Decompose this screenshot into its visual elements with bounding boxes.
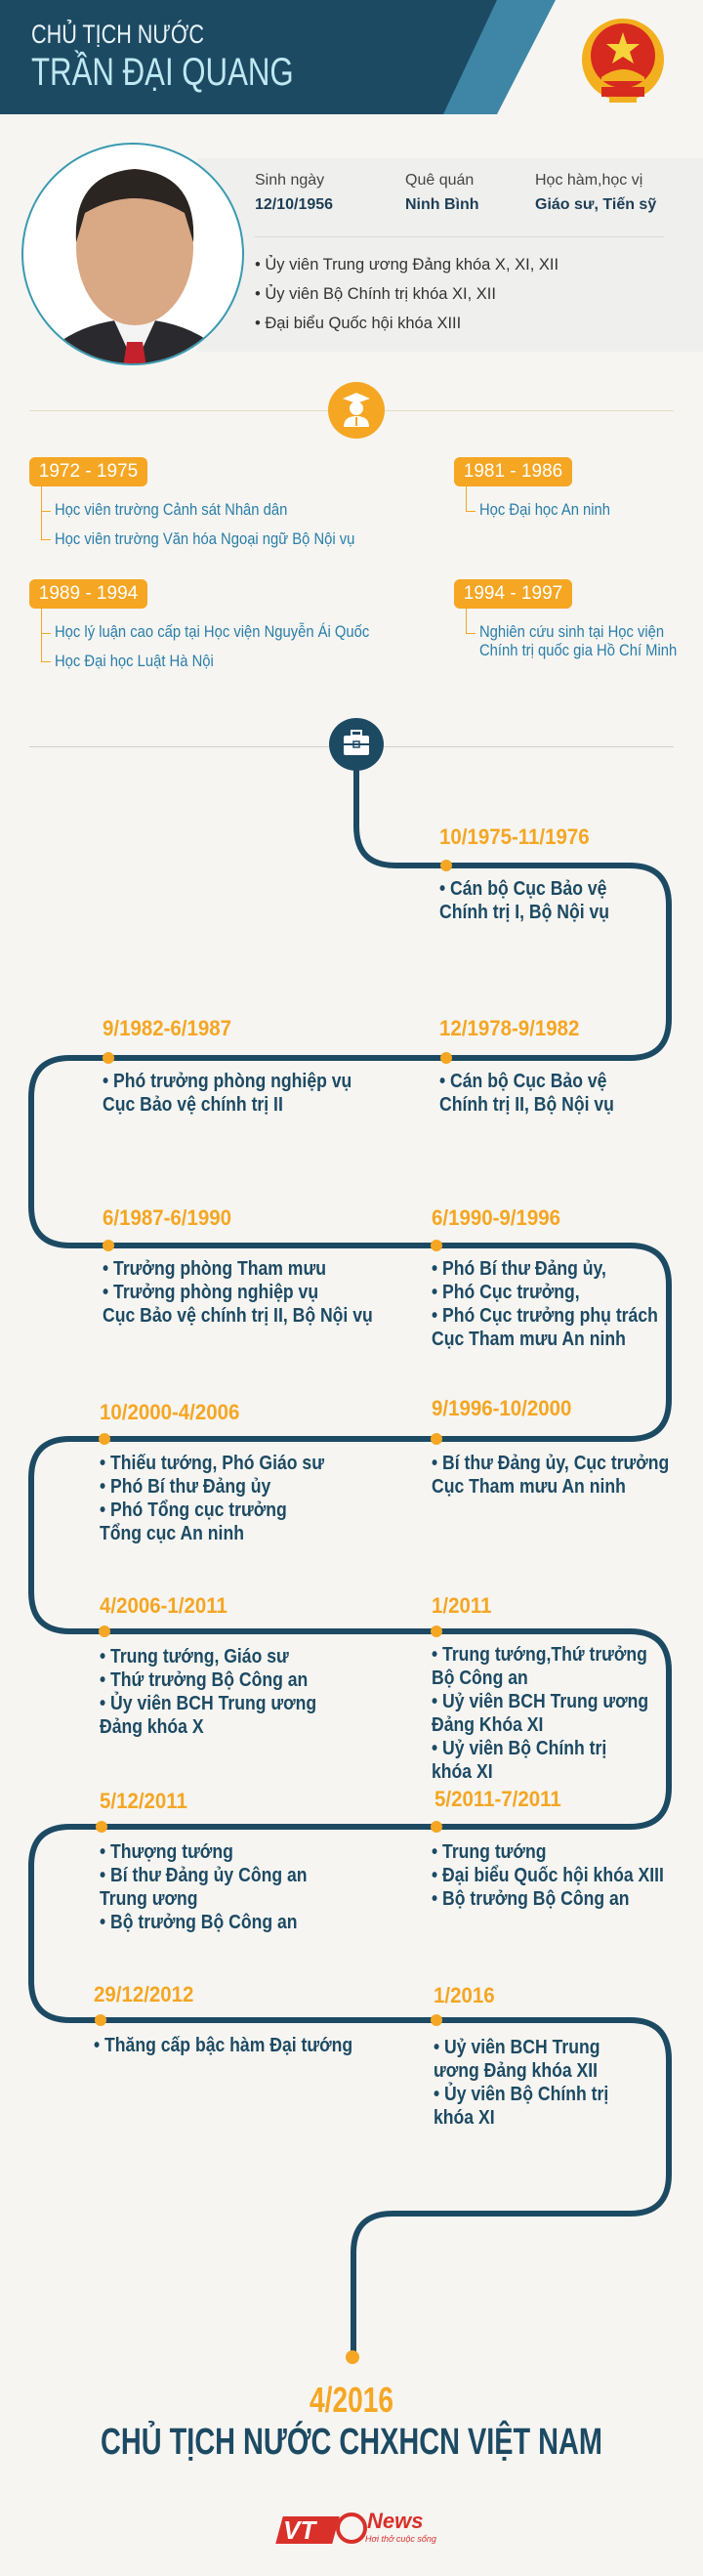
entry 10/2000: • Thiếu tướng, Phó Giáo sư [100,1453,324,1474]
info: hometown [405,172,479,213]
entry 12/1978 [439,1016,614,1116]
icon: national emblem [582,19,664,103]
edu 1989-1994: Học lý luận cao cấp tại Học viện Nguyễn Ái Quốc [55,622,369,641]
entry 4/2006 [100,1593,316,1738]
entry 6/1990: Cục Tham mưu An ninh [432,1329,626,1350]
entry 10/1975 [439,824,609,923]
entry 10/2000: • Phó Bí thư Đảng ủy [100,1476,270,1498]
entry 4/2006: 4/2006-1/2011 [100,1593,227,1618]
bullet list: • Ủy viên Bộ Chính trị khóa XI, XII [255,285,496,303]
entry 9/1996 [432,1396,669,1498]
entry 1/2016: 1/2016 [434,1983,495,2007]
entry 5/12/2011: 5/12/2011 [100,1789,187,1813]
logo: VTC News: News [367,2509,423,2533]
icon: briefcase [329,718,384,771]
final title: CHỦ TỊCH NƯỚC CHXHCN VIỆT NAM [101,2422,602,2463]
entry 6/1987 [103,1205,373,1327]
entry 10/2000: 10/2000-4/2006 [100,1400,239,1424]
entry 9/1996: 9/1996-10/2000 [432,1396,571,1420]
entry 6/1987: 6/1987-6/1990 [103,1205,231,1230]
edu 1972-1975 [29,457,354,548]
info: birth: 12/10/1956 [255,196,333,213]
entry 1/2016: • Uỷ viên BCH Trung [434,2037,600,2058]
bullet list: • Ủy viên Trung ương Đảng khóa X, XI, XII [255,256,558,274]
entry 1/2016: • Ủy viên Bộ Chính trị [434,2084,608,2105]
entry 12/1978: 12/1978-9/1982 [439,1016,579,1040]
entry 1/2016: ương Đảng khóa XII [434,2060,598,2082]
bullet list: • Đại biểu Quốc hội khóa XIII [255,315,461,332]
icon: graduate [328,382,385,439]
edu 1981-1986: Học Đại học An ninh [479,500,610,519]
info: birth [255,172,333,213]
title name: TRẦN ĐẠI QUANG [31,51,294,94]
entry 5/2011: • Trung tướng [432,1841,546,1863]
info: degree: Học hàm,học vị [535,172,642,189]
entry 5/12/2011 [100,1789,308,1933]
entry 1/2011: • Trung tướng,Thứ trưởng [432,1644,647,1666]
entry 6/1990: • Phó Bí thư Đảng ủy, [432,1258,606,1280]
entry 4/2006: • Trung tướng, Giáo sư [100,1646,289,1668]
entry 1/2011: khóa XI [432,1761,493,1783]
entry 4/2006: Đảng khóa X [100,1716,204,1738]
entry 10/2000: • Phó Tổng cục trưởng [100,1499,287,1521]
entry 1/2011: Bộ Công an [432,1668,528,1689]
entry 5/12/2011: • Bộ trưởng Bộ Công an [100,1912,298,1933]
entry 10/1975: Chính trị I, Bộ Nội vụ [439,902,609,923]
entry 9/1982 [103,1016,352,1116]
title line 1: CHỦ TỊCH NƯỚC [31,20,204,49]
entry 10/1975: 10/1975-11/1976 [439,824,590,849]
edu 1989-1994: 1989 - 1994 [39,583,138,604]
entry 12/1978: • Cán bộ Cục Bảo vệ [439,1071,606,1092]
entry 5/12/2011: Trung ương [100,1888,198,1910]
entry 1/2011: • Uỷ viên BCH Trung ương [432,1691,648,1712]
entry 29/12/2012: • Thăng cấp bậc hàm Đại tướng [94,2035,352,2056]
entry 1/2011: • Uỷ viên Bộ Chính trị [432,1738,606,1759]
logo: VTC News: VT [283,2515,315,2545]
entry 5/2011: 5/2011-7/2011 [434,1787,561,1811]
text: • Bộ trưởng Bộ Công an [432,1888,630,1910]
entry 6/1990 [432,1205,658,1350]
entry 1/2016 [434,1983,608,2129]
entry 5/2011: • Đại biểu Quốc hội khóa XIII [432,1865,664,1886]
entry 5/12/2011: • Bí thư Đảng ủy Công an [100,1865,308,1886]
entry 12/1978: Chính trị II, Bộ Nội vụ [439,1094,614,1116]
entry 4/2006: • Thứ trưởng Bộ Công an [100,1669,308,1691]
edu 1972-1975: Học viên trường Văn hóa Ngoại ngữ Bộ Nội vụ [55,529,354,548]
entry 4/2006: • Ủy viên BCH Trung ương [100,1693,316,1714]
info: hometown: Quê quán [405,172,474,189]
entry 9/1996: • Bí thư Đảng ủy, Cục trưởng [432,1453,669,1474]
entry 10/2000 [100,1400,324,1544]
entry 5/2011 [432,1787,664,1910]
entry 9/1996: Cục Tham mưu An ninh [432,1476,626,1498]
entry 10/2000: Tổng cục An ninh [100,1523,244,1544]
info: birth: Sinh ngày [255,172,324,189]
logo: VTC News [275,2509,436,2545]
info panel [197,158,703,352]
bullet list [255,255,558,332]
info: degree [535,172,656,213]
entry 1/2011: 1/2011 [432,1593,491,1618]
edu 1994-1997 [454,579,677,659]
entry 9/1982: Cục Bảo vệ chính trị II [103,1094,283,1116]
info: degree: Giáo sư, Tiến sỹ [535,196,656,213]
entry 1/2011 [432,1593,648,1783]
edu 1981-1986: 1981 - 1986 [464,461,562,482]
entry 5/12/2011: • Thượng tướng [100,1841,233,1863]
entry 6/1987: • Trưởng phòng nghiệp vụ [103,1282,318,1303]
entry 6/1990: • Phó Cục trưởng phụ trách [432,1305,658,1327]
entry 6/1990: • Phó Cục trưởng, [432,1282,580,1303]
entry 6/1987: Cục Bảo vệ chính trị II, Bộ Nội vụ [103,1305,373,1327]
edu 1972-1975: Học viên trường Cảnh sát Nhân dân [55,500,287,519]
entry 9/1982: • Phó trưởng phòng nghiệp vụ [103,1071,352,1092]
edu 1989-1994: Học Đại học Luật Hà Nội [55,652,214,670]
header band [0,0,556,114]
entry 9/1982: 9/1982-6/1987 [103,1016,231,1040]
final date: 4/2016 [310,2380,393,2420]
entry 6/1987: • Trưởng phòng Tham mưu [103,1258,326,1280]
edu 1994-1997: Nghiên cứu sinh tại Học viện [479,622,664,641]
logo: VTC News: Hơi thở cuộc sống [365,2534,436,2544]
edu 1994-1997: Chính trị quốc gia Hồ Chí Minh [479,641,677,659]
entry 29/12/2012: 29/12/2012 [94,1982,193,2006]
entry 29/12/2012 [94,1982,352,2056]
edu 1972-1975: 1972 - 1975 [39,461,138,482]
entry 10/1975: • Cán bộ Cục Bảo vệ [439,878,606,900]
edu 1981-1986 [454,457,610,519]
entry 1/2011: Đảng Khóa XI [432,1714,543,1736]
info: hometown: Ninh Bình [405,196,479,213]
entry 1/2016: khóa XI [434,2107,495,2129]
photo [21,143,244,365]
edu 1994-1997: 1994 - 1997 [464,583,562,604]
edu 1989-1994 [29,579,369,670]
entry 6/1990: 6/1990-9/1996 [432,1205,560,1230]
